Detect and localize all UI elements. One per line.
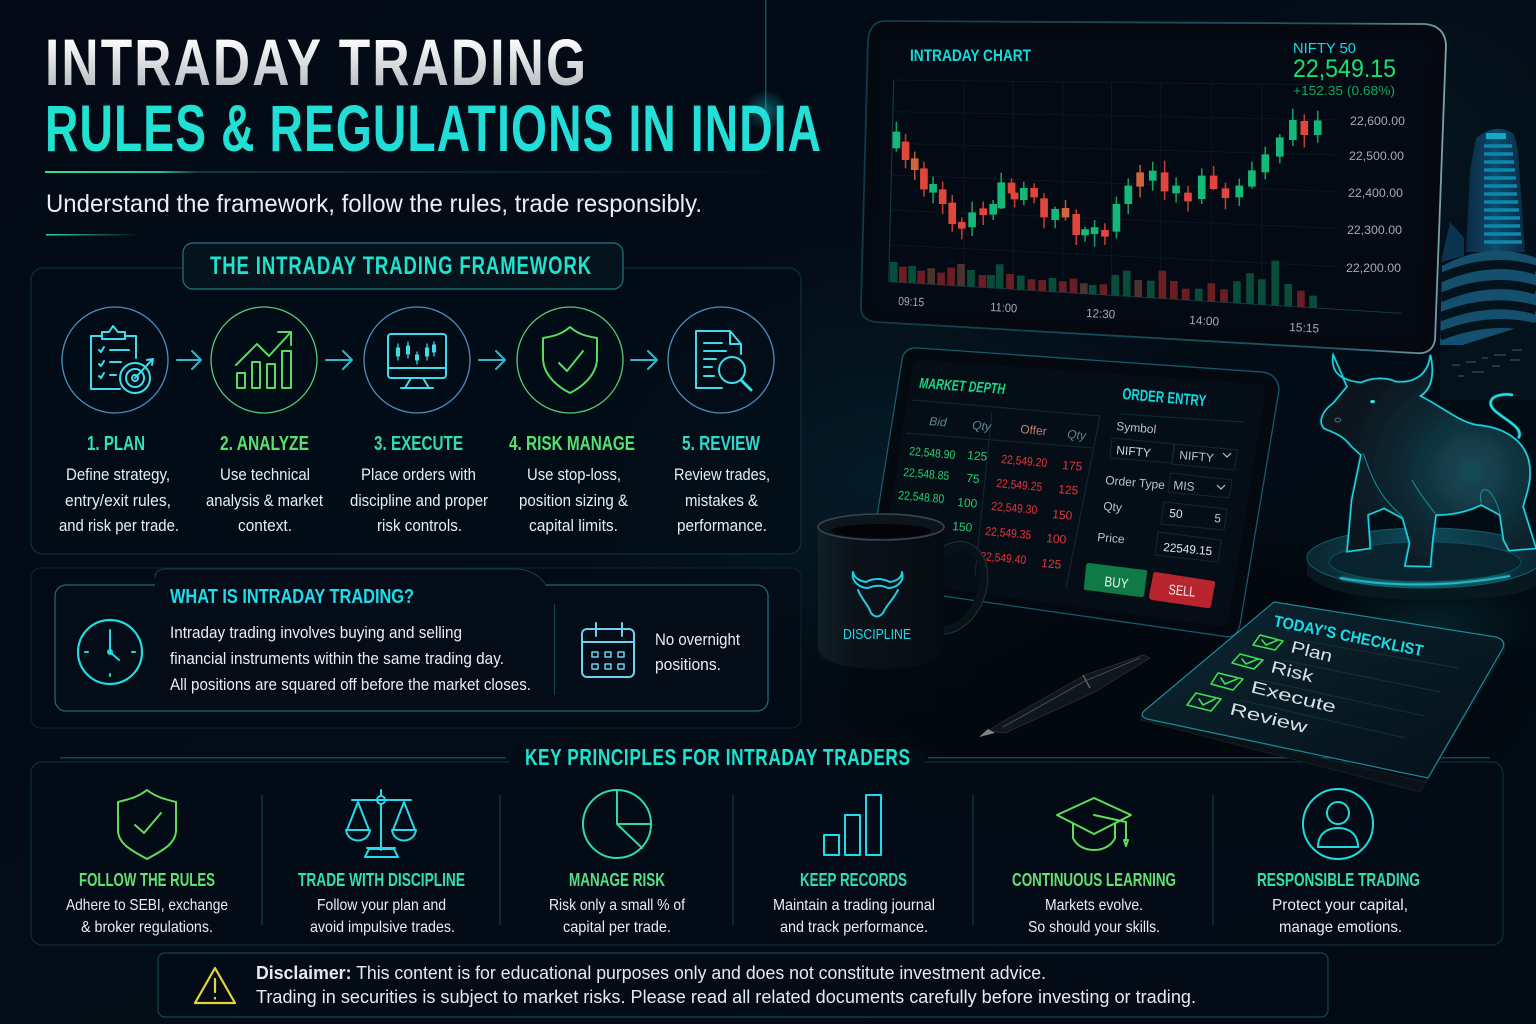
description text xyxy=(170,623,531,694)
step 3 execute: risk controls. xyxy=(377,516,462,535)
sell button xyxy=(1149,572,1215,608)
icon: shield xyxy=(543,327,597,393)
order entry form: NIFTY xyxy=(1179,448,1214,465)
note: no overnight positions xyxy=(655,630,740,674)
time axis: 12:30 xyxy=(1086,306,1116,322)
price axis: 22,300.00 xyxy=(1347,223,1402,237)
principle: manage risk: MANAGE RISK xyxy=(569,870,665,890)
bull silhouette xyxy=(1321,355,1536,567)
order book: 125 xyxy=(1058,482,1079,498)
order book: 22,549.20 xyxy=(1001,452,1048,470)
time axis xyxy=(898,294,1320,336)
price axis: 22,500.00 xyxy=(1349,149,1404,163)
monitor: intraday chart xyxy=(861,21,1446,362)
principle: keep records: Maintain a trading journal xyxy=(773,897,935,914)
principle: follow the rules: FOLLOW THE RULES xyxy=(79,870,215,890)
step 4 risk manage: Use stop-loss, xyxy=(527,465,621,484)
notebook: today's checklist: Review xyxy=(1228,699,1310,737)
chart heading: INTRADAY CHART xyxy=(910,46,1031,65)
order entry form: Order Type xyxy=(1105,473,1166,492)
index readout xyxy=(1293,40,1396,98)
panel: what is intraday trading xyxy=(31,568,801,728)
icon: document and magnifier xyxy=(696,331,751,390)
description text: financial instruments within the same trading day. xyxy=(170,649,504,668)
title: RULES & REGULATIONS IN INDIA xyxy=(45,92,821,166)
mug: discipline: DISCIPLINE xyxy=(843,626,911,643)
order book: 22,549.25 xyxy=(996,476,1043,494)
step 3 execute: discipline and proper xyxy=(350,491,488,510)
price axis: 22,400.00 xyxy=(1348,186,1403,200)
order book: 125 xyxy=(1041,556,1062,572)
principle: follow the rules: & broker regulations. xyxy=(81,919,213,936)
step 1 plan xyxy=(59,307,179,535)
order book: 100 xyxy=(1046,531,1067,547)
pen xyxy=(979,655,1150,737)
red candles xyxy=(902,114,1308,245)
principle: responsible trading: Protect your capital, xyxy=(1272,897,1408,914)
city building xyxy=(1440,129,1536,400)
price axis xyxy=(1346,114,1405,275)
principle: keep records: KEEP RECORDS xyxy=(800,870,907,890)
time axis: 14:00 xyxy=(1189,313,1220,329)
panel: intraday trading framework xyxy=(31,243,801,554)
description text: Intraday trading involves buying and selling xyxy=(170,623,462,642)
time axis: 11:00 xyxy=(990,300,1018,315)
principle: continuous learning xyxy=(1012,798,1176,936)
mug: discipline xyxy=(818,514,988,669)
step 5 review: Review trades, xyxy=(674,465,770,484)
title xyxy=(45,25,821,166)
market depth heading: MARKET DEPTH xyxy=(919,375,1007,398)
order book: 125 xyxy=(967,448,988,464)
principle: trade with discipline: avoid impulsive trades. xyxy=(310,919,455,936)
order book: 150 xyxy=(1052,507,1073,523)
order entry form: 50 xyxy=(1169,506,1184,521)
order book: 22,549.40 xyxy=(980,549,1027,567)
icon: monitor with candles xyxy=(388,334,446,388)
disclaimer: Disclaimer: This content is for educational purposes only and does not constitute investment advice. xyxy=(256,963,1046,983)
principle: responsible trading: manage emotions. xyxy=(1279,919,1402,936)
arrow xyxy=(479,351,505,369)
arrow xyxy=(177,351,201,369)
principle: follow the rules: Adhere to SEBI, exchange xyxy=(66,897,228,914)
notebook: today's checklist xyxy=(1141,602,1505,792)
step 4 risk manage: capital limits. xyxy=(529,516,618,535)
principle: continuous learning: Markets evolve. xyxy=(1045,897,1143,914)
step 5 review xyxy=(668,307,774,535)
step 4 risk manage xyxy=(509,307,635,535)
framework heading: THE INTRADAY TRADING FRAMEWORK xyxy=(210,251,591,280)
step 3 execute: Place orders with xyxy=(361,465,476,484)
principles heading: KEY PRINCIPLES FOR INTRADAY TRADERS xyxy=(525,746,910,771)
green candles xyxy=(893,109,1322,247)
step 2 analyze: Use technical xyxy=(220,465,310,484)
icon: clipboard and target xyxy=(91,326,153,393)
step 5 review: 5. REVIEW xyxy=(682,433,760,455)
principle: trade with discipline xyxy=(298,790,465,936)
step 1 plan: 1. PLAN xyxy=(87,433,145,455)
principle: responsible trading xyxy=(1257,789,1420,936)
panel: what is intraday trading: WHAT IS INTRADAY TRADING? xyxy=(170,586,414,608)
icon: rising chart xyxy=(236,332,291,388)
icon: warning triangle xyxy=(195,968,235,1003)
order book: Bid xyxy=(929,414,948,430)
step 5 review: mistakes & xyxy=(685,491,759,510)
icon: calendar xyxy=(582,623,634,677)
step 2 analyze: context. xyxy=(238,516,292,535)
step 1 plan: Define strategy, xyxy=(66,465,170,484)
principle: manage risk xyxy=(549,790,685,936)
order entry form: 5 xyxy=(1214,511,1222,526)
order book: Qty xyxy=(1067,427,1088,443)
icon: clock xyxy=(78,620,142,684)
time axis: 09:15 xyxy=(898,294,925,309)
icon: bull head logo xyxy=(853,572,903,616)
step 3 execute xyxy=(350,307,488,535)
order book: Qty xyxy=(972,418,993,434)
candlestick chart xyxy=(888,80,1402,314)
description text: All positions are squared off before the market closes. xyxy=(170,675,531,694)
checkbox items xyxy=(1187,635,1283,711)
time axis: 15:15 xyxy=(1289,320,1320,336)
principles heading xyxy=(60,746,1490,772)
disclaimer: Trading in securities is subject to market risks. Please read all related documents carefully before investing or trading. xyxy=(256,987,1196,1007)
note: no overnight positions: positions. xyxy=(655,655,721,674)
buy button xyxy=(1084,563,1147,597)
framework heading xyxy=(183,243,623,289)
step 2 analyze: 2. ANALYZE xyxy=(220,433,309,455)
arrow xyxy=(631,351,657,369)
step 2 analyze xyxy=(206,307,323,535)
order book: 175 xyxy=(1062,458,1083,474)
step 5 review: performance. xyxy=(677,516,767,535)
order entry form: Symbol xyxy=(1116,419,1157,436)
order book: 22,549.30 xyxy=(991,499,1038,517)
step 2 analyze: analysis & market xyxy=(206,491,323,510)
step 1 plan: entry/exit rules, xyxy=(65,491,171,510)
order book: 22,548.90 xyxy=(909,444,956,462)
price axis: 22,200.00 xyxy=(1346,261,1401,275)
order book: 22,549.35 xyxy=(985,524,1032,542)
order book: 150 xyxy=(952,519,973,535)
principle: manage risk: Risk only a small % of xyxy=(549,897,685,914)
panel: key principles xyxy=(31,746,1503,945)
notebook: today's checklist: Execute xyxy=(1249,677,1338,717)
sell button: SELL xyxy=(1168,581,1196,600)
arrow xyxy=(326,351,352,369)
principle: keep records: and track performance. xyxy=(780,919,928,936)
principle: trade with discipline: TRADE WITH DISCIPLINE xyxy=(298,870,465,890)
step 4 risk manage: position sizing & xyxy=(519,491,629,510)
order book: Offer xyxy=(1020,422,1047,438)
index readout: NIFTY 50 xyxy=(1293,40,1356,57)
step 3 execute: 3. EXECUTE xyxy=(374,433,463,455)
order book xyxy=(898,400,1100,588)
step 4 risk manage: 4. RISK MANAGE xyxy=(509,433,635,455)
notebook: today's checklist: Plan xyxy=(1289,637,1334,666)
disclaimer xyxy=(158,953,1328,1017)
price axis: 22,600.00 xyxy=(1350,114,1405,128)
pedestal xyxy=(1307,528,1536,600)
subtitle: Understand the framework, follow the rules, trade responsibly. xyxy=(46,190,702,218)
order entry form: Qty xyxy=(1103,499,1123,515)
principle: continuous learning: CONTINUOUS LEARNING xyxy=(1012,870,1176,890)
order book: 75 xyxy=(966,471,981,486)
principle: trade with discipline: Follow your plan and xyxy=(317,897,446,914)
bull statue on pedestal xyxy=(1307,355,1536,670)
volume bars xyxy=(890,260,1317,308)
title: INTRADAY TRADING xyxy=(45,25,586,99)
order entry form: ORDER ENTRY xyxy=(1122,386,1207,410)
principle: continuous learning: So should your skills. xyxy=(1028,919,1160,936)
note: no overnight positions: No overnight xyxy=(655,630,740,649)
principle: manage risk: capital per trade. xyxy=(563,919,671,936)
tablet: market depth and order entry xyxy=(866,348,1279,637)
order book: 22,548.80 xyxy=(898,488,945,506)
order entry form: NIFTY xyxy=(1116,443,1151,460)
buy button: BUY xyxy=(1104,573,1130,592)
index readout: +152.35 (0.68%) xyxy=(1293,83,1395,98)
index readout: 22,549.15 xyxy=(1293,55,1396,83)
order entry form xyxy=(1097,386,1244,562)
notebook: today's checklist: Risk xyxy=(1269,657,1316,686)
principle: follow the rules xyxy=(66,790,228,936)
principle: responsible trading: RESPONSIBLE TRADING xyxy=(1257,870,1420,890)
order book: 100 xyxy=(957,495,978,511)
principle: keep records xyxy=(773,795,935,936)
step 1 plan: and risk per trade. xyxy=(59,516,179,535)
order entry form: Price xyxy=(1097,530,1126,546)
notebook: today's checklist: TODAY'S CHECKLIST xyxy=(1272,613,1425,660)
order entry form: 22549.15 xyxy=(1163,540,1213,558)
order entry form: MIS xyxy=(1173,478,1195,494)
order book: 22,548.85 xyxy=(903,465,950,483)
